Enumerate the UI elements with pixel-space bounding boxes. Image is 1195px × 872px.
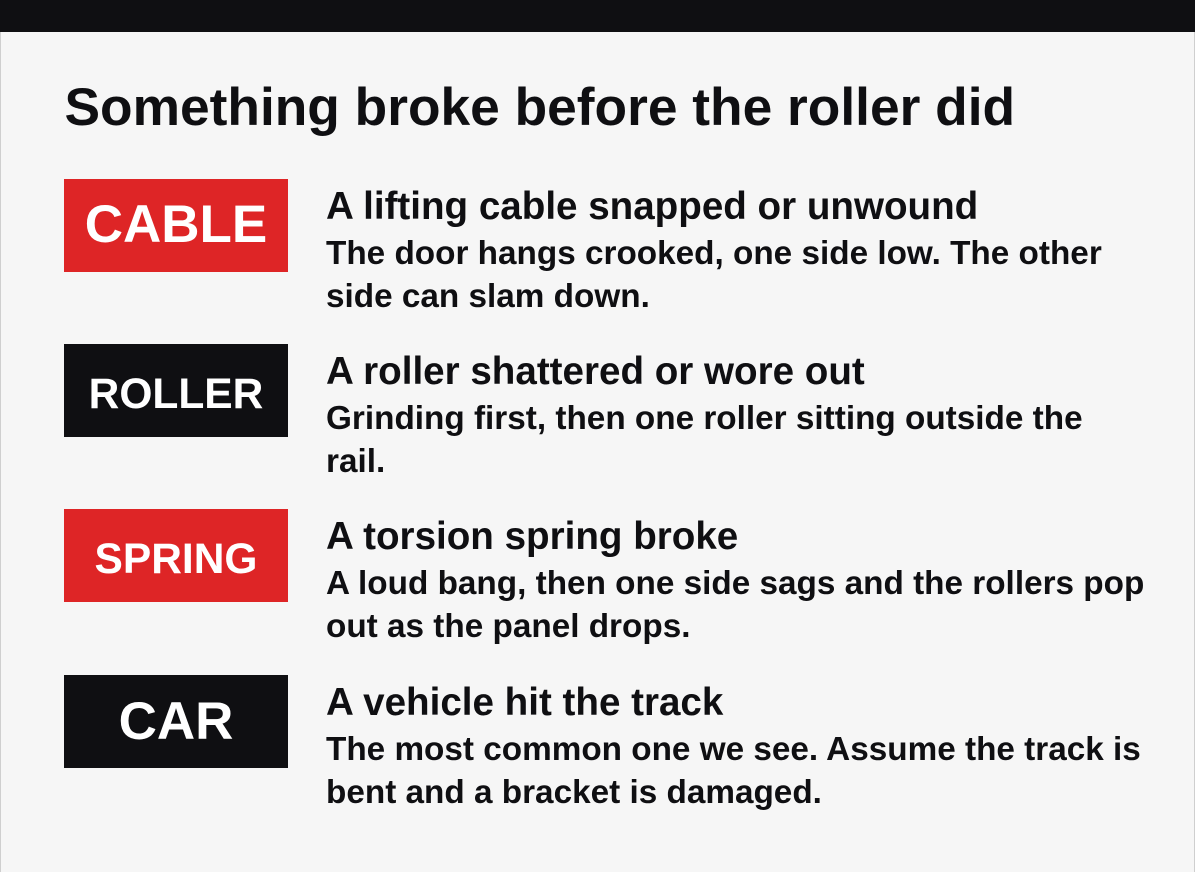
body: cable: side can slam down.	[326, 278, 650, 314]
tag: car	[64, 675, 288, 768]
heading: cable: A lifting cable snapped or unwound	[326, 185, 978, 228]
body: roller	[326, 400, 1083, 480]
title: Something broke before the roller did	[64, 78, 1015, 136]
heading: car: A vehicle hit the track	[326, 681, 723, 724]
tag: spring	[64, 509, 288, 602]
body: cable: The door hangs crooked, one side low. The other	[326, 234, 1102, 272]
tag: roller: ROLLER	[89, 370, 263, 418]
body: spring: out as the panel drops.	[326, 608, 690, 644]
tag: car: CAR	[119, 692, 233, 750]
body: spring	[326, 564, 1144, 644]
row: roller	[64, 344, 1083, 480]
tag: spring: SPRING	[95, 536, 257, 582]
row: cable	[64, 179, 1102, 314]
heading: roller: A roller shattered or wore out	[326, 350, 865, 393]
body: cable	[326, 234, 1102, 314]
body: car: bent and a bracket is damaged.	[326, 774, 822, 810]
row: spring	[64, 509, 1144, 644]
body: car: The most common one we see. Assume the track is	[326, 730, 1141, 768]
body: roller: Grinding first, then one roller sitting outside the	[326, 400, 1083, 436]
heading: spring: A torsion spring broke	[326, 515, 738, 558]
body: roller: rail.	[326, 442, 385, 480]
body: car	[326, 730, 1141, 810]
tag: roller	[64, 344, 288, 437]
top bar	[0, 0, 1195, 32]
tag: cable	[64, 179, 288, 272]
row: car	[64, 675, 1141, 810]
tag: cable: CABLE	[85, 195, 267, 254]
body: spring: A loud bang, then one side sags and the rollers pop	[326, 564, 1144, 602]
